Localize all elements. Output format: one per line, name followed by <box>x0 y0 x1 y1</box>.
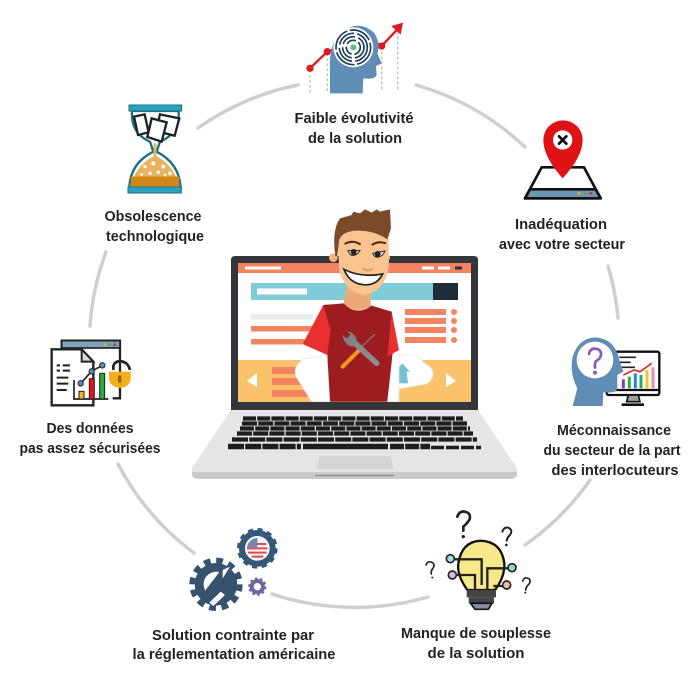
laptop base <box>192 410 517 479</box>
character <box>295 209 433 402</box>
flag gear <box>239 530 275 566</box>
heading: Des données: Des données <box>46 421 134 437</box>
heading: des interlocuteurs: des interlocuteurs <box>552 463 678 479</box>
t-shirt <box>323 303 393 402</box>
heading: avec votre secteur: avec votre secteur <box>499 237 625 253</box>
heading: du secteur de la part: du secteur de la part <box>544 443 681 459</box>
laptop screen <box>231 256 478 410</box>
icon: map pin with cross <box>525 120 601 198</box>
icon: gears with flag and wrench <box>193 530 275 608</box>
icon: head with question mark and monitor <box>572 337 659 406</box>
neck <box>343 287 371 310</box>
laptop with character <box>192 209 517 479</box>
heading: Méconnaissance: Méconnaissance <box>557 423 671 439</box>
icon: document, chart and padlock <box>52 341 131 405</box>
icon: hourglass with devices <box>128 105 182 193</box>
heading: Obsolescence: Obsolescence <box>104 209 202 225</box>
heading: Solution contrainte par: Solution contrainte par <box>152 628 314 644</box>
heading: de la solution: de la solution <box>428 646 524 662</box>
arms <box>295 353 399 402</box>
small gear <box>249 579 265 595</box>
cloud <box>393 355 433 390</box>
heading: la réglementation américaine: la réglementation américaine <box>132 647 336 663</box>
large gear with wrench <box>193 561 239 608</box>
heading: Faible évolutivité: Faible évolutivité <box>294 111 414 127</box>
tools on shirt <box>342 331 377 367</box>
icon: head with maze and rising arrow <box>306 23 403 93</box>
heading: technologique: technologique <box>106 229 204 245</box>
heading: Inadéquation: Inadéquation <box>515 217 607 233</box>
head <box>329 209 391 295</box>
heading: pas assez sécurisées: pas assez sécurisées <box>20 441 160 457</box>
heading: Manque de souplesse: Manque de souplesse <box>401 626 551 642</box>
icon: light bulb with question marks <box>426 512 530 609</box>
heading: de la solution: de la solution <box>308 131 402 147</box>
